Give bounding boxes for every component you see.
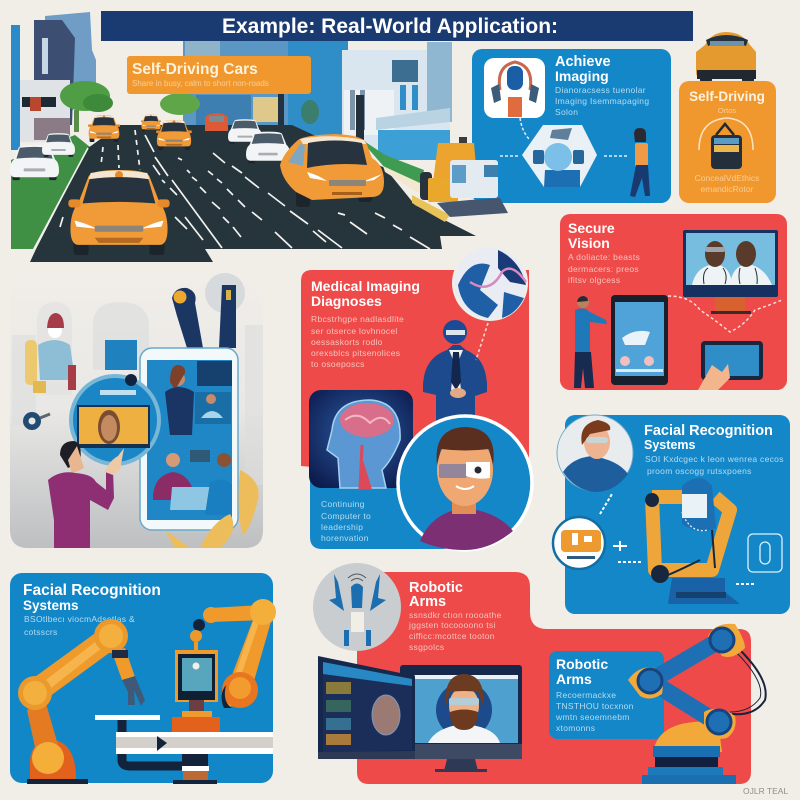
phone content: woman [165,365,194,435]
white cars [10,119,290,180]
dashed connectors [600,494,756,584]
heading: Facial Recognition [644,423,773,439]
dashed link [476,323,488,360]
body text: Rbcstrhgpe nadlasdlite [311,314,404,324]
body text: horenvation [321,533,369,543]
body text: Continuing [321,499,365,509]
small orange cars [88,115,192,150]
tablet [611,295,668,385]
inner blue card: Arms [556,671,592,687]
label: self-driving cars: Share in busy, calm to short non-roads [132,79,269,88]
panel: medical imaging: Diagnoses [311,293,382,309]
body text: dermacers: preos [568,264,639,274]
label: self-driving cars [127,56,311,94]
plus sign [613,541,627,551]
monitor with doctors [683,230,778,314]
body text [321,499,371,543]
inner blue card: TNSTHOU tocxnon [556,701,634,711]
phone content: two people [153,450,232,515]
body text: jggsten tocoooono tsi [408,620,496,630]
big orange car right [280,134,384,207]
panel: self-driving: emandicRotor [701,184,754,194]
body text: orexsblcs pitsenolices [311,348,400,358]
icon card: hands [484,58,545,118]
panel: robotic arms [313,563,766,784]
title bar [101,11,693,41]
inner blue card [549,651,664,739]
buildings skyline [11,12,452,160]
hexagon diagram [522,125,597,187]
trees [60,81,319,132]
lane markings [34,130,430,249]
body text [645,454,784,476]
icon: capsule card [748,534,782,572]
red car [205,113,228,131]
body text: Computer to [321,511,371,521]
street scene [10,12,476,262]
phone [140,348,238,530]
background arches [12,302,263,485]
panel: self-driving: Ortos [718,106,736,115]
robot vehicle [420,137,508,217]
panel: robotic arms: Arms [409,594,446,610]
person with tablet [574,296,607,388]
desktop monitor with man [400,665,522,772]
panel: medical lower blue [310,465,480,549]
circle: man with VR headset [398,416,532,550]
body text: ssnsdkr ctıon roooathe [409,610,502,620]
body text [311,314,404,369]
robot arms [172,273,245,348]
woman figure [630,128,650,197]
road [30,125,476,262]
panel: facial recognition bottom-left: cotsscrs [24,627,58,637]
panel: facial recognition right: Systems [644,438,695,452]
panel: facial recognition bottom-left: Systems [23,598,79,613]
heading: Robotic [409,580,463,596]
phone content: screens [197,361,232,386]
monitor on stand [172,650,220,732]
laptop dashboard [318,656,415,759]
body text: BSOtlbecı viocmAdsetlas & [24,614,135,624]
body text: cifficc:mcottce tooton [409,631,495,641]
body text: ifitsv olgcess [568,275,620,285]
inner blue card: xtomonns [556,723,595,733]
heading: Facial Recognition [23,582,161,599]
heading: Secure [568,220,615,236]
grass [11,135,90,249]
man in purple [48,441,124,548]
circle: machine icon [553,517,605,569]
wrench icon [23,412,50,430]
big orange car front [68,170,170,255]
small tablet with hand [698,341,763,390]
left robot arm [18,619,145,784]
panel: secure vision [560,214,787,390]
dashed path [668,296,782,332]
panel: left illustration [10,268,263,548]
inner blue card: wmtn seoemnebm [555,712,630,722]
circle: man [557,415,633,492]
panel: facial recognition bottom-left [10,573,276,784]
panel: adaptive imaging: Imaging [555,68,609,84]
body text: Imaging Isemmapaging [555,96,649,106]
body text: ser otserce lovhnocel [311,326,398,336]
road curb [383,166,422,195]
panel: adaptive imaging [472,49,671,203]
icon: car in arch [699,118,753,169]
title bar: Example: Real-World Application: [222,15,558,38]
heading: Achieve [555,54,611,70]
leaves [165,470,259,548]
panel: medical imaging [301,245,529,480]
panel: secure vision: Vision [568,235,610,251]
body text: oessaskorts rodlo [311,337,383,347]
body text: ssgpolcs [409,642,444,652]
small chart card [105,340,137,370]
footer mark: OJLR TEAL [743,786,788,796]
body text: SOI Kxdcgec k leon wenrea cecos [645,454,784,464]
car: rear view [696,32,756,82]
body text [408,610,502,652]
doctor figure [423,320,487,425]
circle: gripper icon [313,563,401,651]
body text: to osoeposcs [311,359,365,369]
dashed connectors [500,118,628,156]
conveyor [95,715,273,784]
circle: ligament detail [452,245,528,321]
body text: leadership [321,522,363,532]
blue robot arm [628,624,766,784]
inner blue card: Recoermackxe [556,690,616,700]
heading: Medical Imaging [311,278,420,294]
body text [568,252,640,285]
label: self-driving cars: Self-Driving Cars [132,61,258,78]
magnifier circle [71,374,159,464]
panel: facial recognition right [553,415,790,614]
panel: self-driving [679,81,776,203]
body text: A doliacte: beasts [568,252,640,262]
body text [555,85,649,117]
body text: Solon [555,107,578,117]
card: brain scan [309,390,413,488]
body text: proom oscogg rutsxpoens [647,466,752,476]
body text: Dianoracsess tuenolar [555,85,646,95]
robot arm [645,478,740,604]
right robot arm [190,599,276,708]
inner blue card: Robotic [556,656,608,672]
body text: ConcealVdEthics [695,173,759,183]
heading: Self-Driving [689,89,765,104]
worker figure [25,313,76,393]
